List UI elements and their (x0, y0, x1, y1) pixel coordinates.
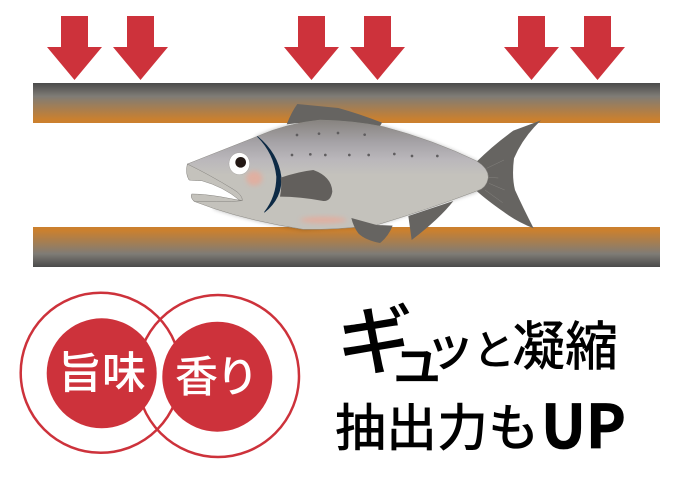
open mouth (187, 180, 239, 200)
lower jaw (191, 194, 242, 202)
label: aroma: 香り (175, 354, 259, 402)
gill line (257, 136, 281, 212)
big gi: ギ (337, 300, 413, 385)
arrow 5 (504, 16, 559, 80)
pressure arrows (47, 16, 625, 80)
salmon illustration (186, 104, 541, 243)
arrow 3 (284, 16, 339, 80)
small yu: ュ (388, 329, 446, 394)
outer ring: left (21, 293, 181, 453)
arrow 2 (113, 16, 168, 80)
cheek blush (246, 171, 262, 186)
arrow 6 (570, 16, 625, 80)
upper jaw (186, 164, 242, 201)
ventral fin (351, 218, 393, 243)
inner circle: umami (47, 318, 157, 428)
inner circle: aroma (162, 322, 272, 432)
label: umami: 旨味 (58, 349, 146, 398)
body glow (213, 120, 488, 229)
pipe wall: top (33, 83, 660, 123)
pipe wall: bottom (33, 227, 660, 267)
UP: UP (541, 379, 626, 466)
overlapping circles (21, 293, 299, 457)
belly blush (300, 217, 347, 223)
extraction text: 抽出力も (335, 400, 539, 457)
eye (229, 153, 250, 175)
pupil (235, 157, 246, 168)
body (187, 120, 488, 229)
outer ring: right (137, 295, 299, 457)
arrow 1 (47, 16, 102, 80)
pectoral fin (280, 170, 332, 201)
eye white (229, 153, 250, 175)
headline line 1 (337, 300, 618, 394)
anal fin (408, 201, 453, 240)
spots (291, 132, 439, 157)
dorsal fin (287, 104, 382, 127)
gyoshuku: 凝縮 (512, 318, 618, 377)
tail rays (485, 160, 505, 203)
arrow 4 (350, 16, 405, 80)
to: と (473, 327, 515, 374)
small tsu: ッ (425, 320, 475, 376)
headline line 2 (335, 379, 626, 466)
tail fin (477, 120, 541, 228)
